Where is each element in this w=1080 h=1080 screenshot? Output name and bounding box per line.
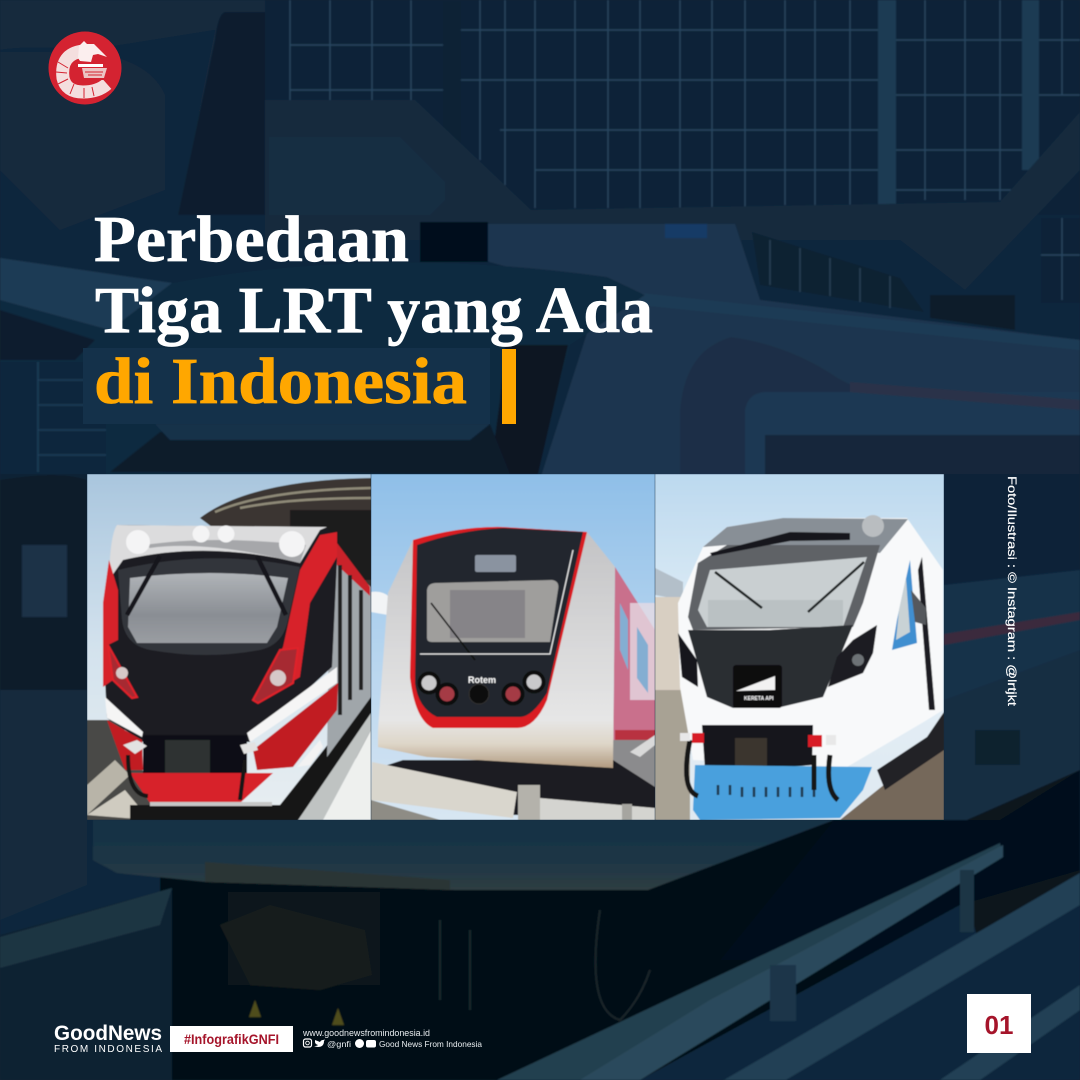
website and social handles: www.goodnewsfromindonesia.id: [302, 1028, 430, 1038]
side car: [612, 567, 655, 741]
GoodNews logotype: GoodNews: [54, 1022, 162, 1045]
station arch: [200, 478, 371, 600]
photo 1: red and black LRT: [87, 474, 371, 820]
lower train nose: [93, 820, 834, 890]
body: [378, 527, 615, 768]
photo credit: Foto/Ilustrasi : © Instagram : @lrtjkt: [1005, 476, 1019, 707]
Rotem logo: Rotem: [468, 675, 496, 685]
title line 1: Perbedaan: [94, 203, 409, 276]
guideway: [371, 762, 517, 818]
coupler: [143, 735, 247, 775]
title: [83, 203, 653, 424]
undercarriage: [160, 820, 1000, 1080]
red swoosh left: [103, 560, 118, 687]
headlights: [108, 645, 137, 698]
website and social handles: [302, 1028, 482, 1049]
lower red panels: [253, 683, 338, 770]
body front black: [103, 525, 337, 742]
photo 3: white LRT with blue skirt: KERETA API: [744, 696, 774, 702]
footer brand: FROM INDONESIA: [54, 1044, 162, 1055]
railing and fence: [655, 568, 683, 600]
roof panel: [703, 518, 908, 553]
underframe: [372, 760, 655, 815]
left concrete structure: [0, 0, 265, 215]
front mask: [410, 527, 587, 728]
body: [678, 518, 943, 767]
page number: [967, 994, 1031, 1053]
roof beam across facade: [531, 112, 1080, 290]
title line 3: di Indonesia: [94, 345, 467, 418]
title line 2: Tiga LRT yang Ada: [95, 274, 653, 347]
walkway left: [0, 888, 172, 1080]
roof box and train roofline: [483, 224, 1080, 480]
red skirt: [130, 773, 273, 803]
left side panel behind photos: [0, 474, 87, 874]
pantograph equipment: [752, 232, 924, 312]
right side train body: [944, 474, 1080, 820]
hashtag badge: #InfografikGNFI: [184, 1032, 279, 1047]
side car with windows: [327, 550, 371, 757]
roof: [109, 525, 327, 580]
hoses: [686, 740, 838, 800]
side door and mirror: [892, 560, 917, 650]
windscreen: [688, 545, 880, 630]
blue skirt: [693, 765, 872, 820]
hashtag badge: [170, 1026, 293, 1052]
guideway beams: [497, 843, 1003, 1080]
black mask: [688, 625, 853, 708]
page number: 01: [985, 1010, 1013, 1040]
website and social handles: @gnfi: [327, 1039, 351, 1049]
pink side panel: [680, 337, 1080, 474]
logo: red garuda medallion: [48, 32, 122, 104]
lamps: [420, 674, 438, 692]
red swoosh right: [282, 531, 338, 681]
title band behind orange line: [83, 348, 490, 424]
white stripes: [105, 697, 143, 737]
tracks: [87, 719, 151, 820]
photo 3: white LRT with blue skirt: [655, 474, 944, 820]
building glass facade: [265, 0, 1080, 215]
accent bar: [502, 349, 516, 424]
website and social handles: Good News From Indonesia: [379, 1039, 482, 1049]
photo 2: silver Hyundai Rotem LRT: [371, 474, 655, 820]
KA logo: [733, 665, 782, 708]
title arch region: [0, 258, 645, 474]
coupler: [702, 725, 813, 772]
footer brand: [54, 1022, 482, 1055]
windscreen: [118, 558, 300, 655]
